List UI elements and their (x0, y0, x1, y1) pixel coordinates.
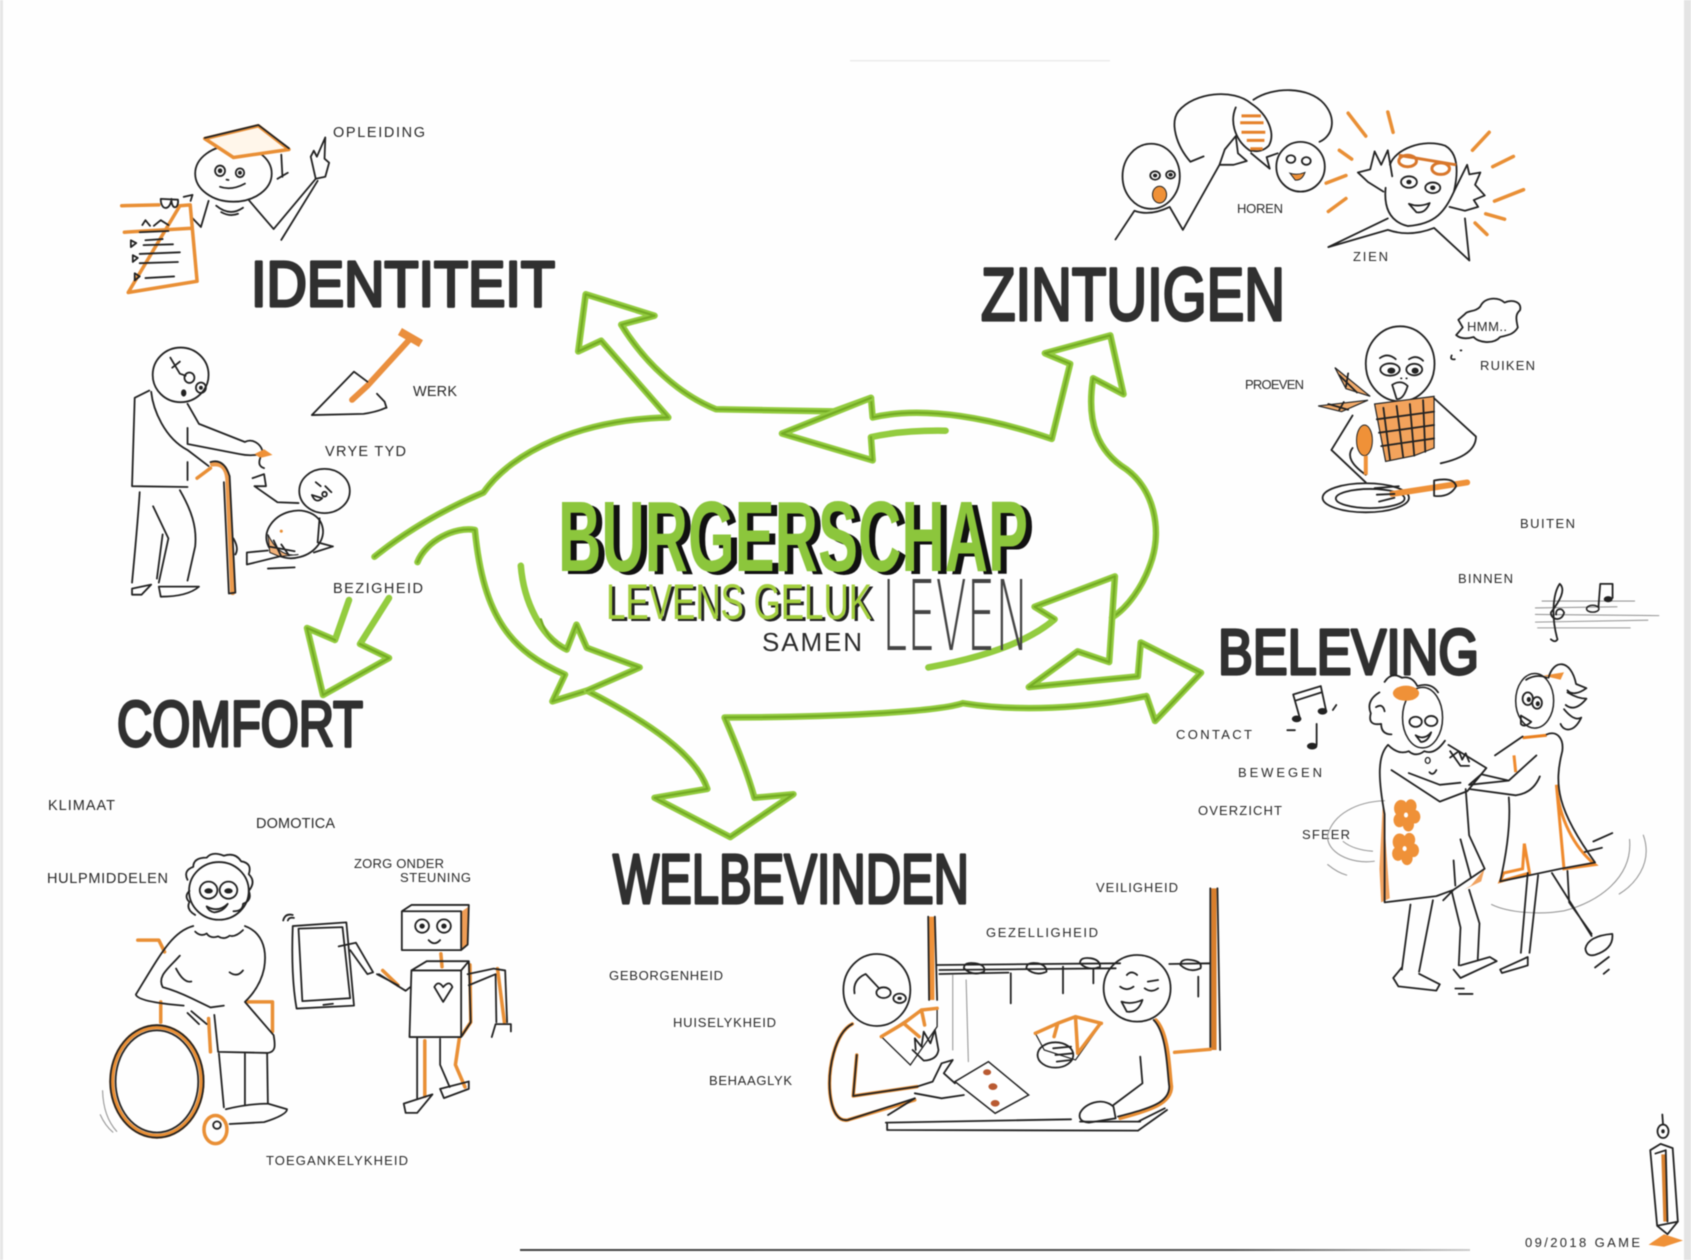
green arrows loop (374, 294, 1201, 837)
illustration: two people playing cards (830, 888, 1220, 1131)
label: hulpmiddelen: HULPMIDDELEN (47, 871, 168, 887)
panel: identiteit (122, 125, 555, 597)
illustrations: zintuigen (1115, 90, 1659, 641)
icon: shovel in a mound (312, 331, 421, 415)
subheading: levensgeluk: LEVENS GELUK (606, 574, 872, 630)
dancer: young woman (1469, 664, 1612, 974)
title: Burgerschap (558, 481, 1034, 673)
illustrations: identiteit (122, 125, 421, 597)
icon: graduate with diploma cv (122, 125, 329, 293)
heading fill: BURGERSCHAP (558, 481, 1028, 593)
label: zorgondersteuning (354, 856, 471, 885)
label: klimaat: KLIMAAT (48, 798, 115, 814)
icon: person tasting food (1318, 299, 1520, 512)
label: overzicht: OVERZICHT (1198, 803, 1282, 818)
label: horen: HOREN (1237, 201, 1283, 216)
label: werk: WERK (413, 384, 457, 400)
swirl motion lines (1328, 801, 1646, 913)
label: vrije tijd: VRYE TYD (325, 444, 406, 460)
window and curtain (928, 888, 1220, 1062)
label: sfeer: SFEER (1302, 827, 1350, 842)
label: bezigheid: BEZIGHEID (333, 581, 423, 597)
label: opleiding: OPLEIDING (333, 125, 425, 141)
icon: pencil signature (1649, 1114, 1683, 1247)
icon: person seeing and hearing (1326, 112, 1524, 260)
left player (830, 954, 964, 1120)
dancer: older woman (1369, 675, 1497, 994)
label: proeven: PROEVEN (1245, 377, 1304, 392)
icon: baby crawling (233, 469, 350, 569)
label: behaaglijk: BEHAAGLYK (709, 1073, 792, 1088)
infographic canvas: LEVEN (882, 560, 1029, 673)
right player (1035, 955, 1171, 1123)
subheading: samen: SAMEN (762, 627, 862, 657)
heading: welbevinden: WELBEVINDEN (613, 840, 969, 918)
illustrations: beleving (1287, 664, 1683, 1247)
subheading shadow: LEVENS GELUK (609, 576, 875, 632)
icon: robot with tablet (283, 905, 511, 1113)
label: date and signature: 09/2018 GAME (1525, 1235, 1640, 1250)
table (886, 1098, 1167, 1131)
icon: old man with cane (132, 348, 272, 597)
panel: welbevinden (609, 840, 1220, 1131)
label: huiselijkheid: HUISELYKHEID (673, 1015, 776, 1030)
label: veiligheid: VEILIGHEID (1096, 880, 1178, 895)
label: geborgenheid: GEBORGENHEID (609, 968, 723, 983)
panel: zintuigen (981, 90, 1659, 641)
icon: music staff (1535, 584, 1659, 641)
panel: central arrow network (307, 294, 1201, 837)
label: gezelligheid: GEZELLIGHEID (986, 925, 1098, 940)
heading: comfort: COMFORT (117, 688, 363, 760)
playing card with hearts (955, 1062, 1029, 1113)
label: buiten: BUITEN (1520, 516, 1575, 531)
icon: people talking (1115, 90, 1332, 239)
label: binnen: BINNEN (1458, 571, 1513, 586)
label: contact: CONTACT (1176, 727, 1252, 742)
panel: beleving (1176, 616, 1683, 1250)
arrow to comfort (307, 598, 389, 695)
label: hmm: HMM.. (1467, 319, 1507, 334)
label: zorgondersteuning: ZORG ONDER (354, 856, 444, 871)
heading shadow: BURGERSCHAP (564, 484, 1034, 596)
icon: music notes (1287, 686, 1336, 750)
panel: comfort (47, 688, 511, 1168)
label: ruiken: RUIKEN (1480, 358, 1535, 373)
heading: identiteit: IDENTITEIT (251, 248, 555, 320)
label: zorgondersteuning: STEUNING (400, 870, 471, 885)
icon: woman in wheelchair (100, 854, 287, 1144)
label: bewegen: BEWEGEN (1238, 765, 1322, 780)
label: zien: ZIEN (1353, 249, 1388, 264)
heading: beleving: BELEVING (1218, 616, 1479, 688)
label: toegankelijkheid: TOEGANKELYKHEID (266, 1153, 408, 1168)
heading: zintuigen: ZINTUIGEN (981, 253, 1285, 336)
illustrations: comfort (100, 854, 511, 1144)
label: domotica: DOMOTICA (256, 816, 335, 832)
